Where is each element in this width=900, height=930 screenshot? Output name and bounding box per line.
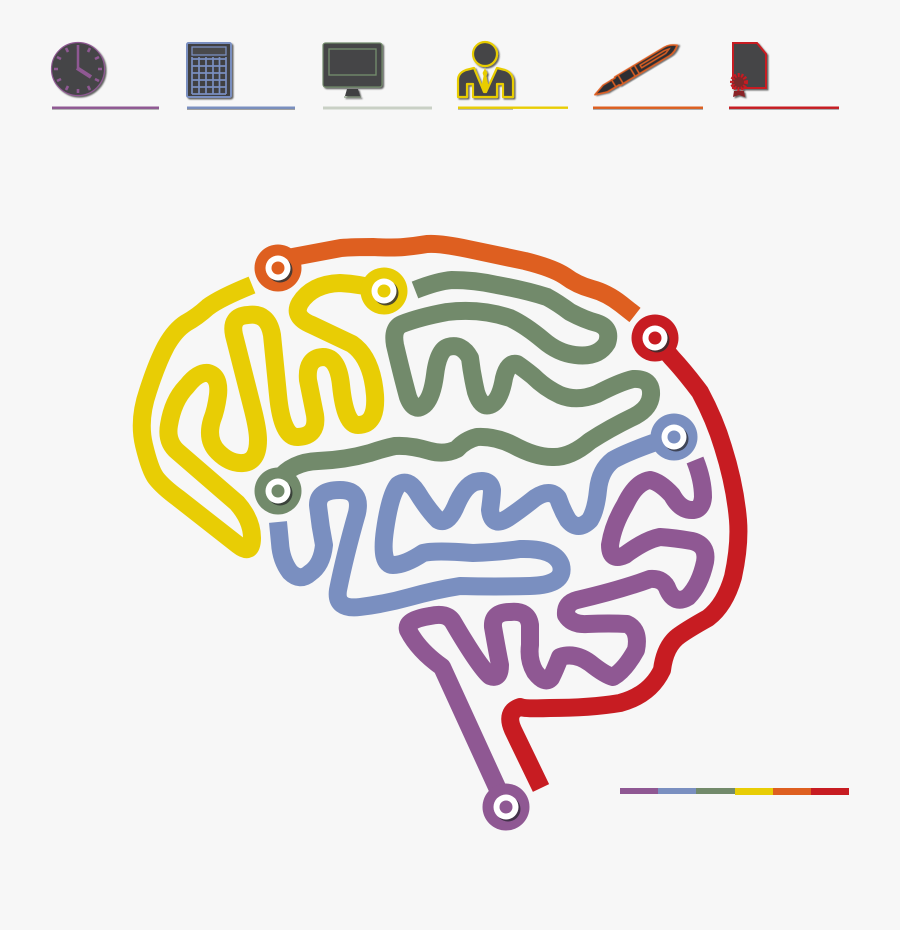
icon row xyxy=(52,41,839,110)
node: purple xyxy=(482,784,530,830)
icon: businessperson xyxy=(458,42,513,97)
node: blue xyxy=(650,414,698,460)
icon underlines xyxy=(52,106,839,110)
path: purple xyxy=(408,460,705,807)
icon: fountain pen xyxy=(592,41,680,99)
path: red xyxy=(510,338,738,788)
icon: calculator xyxy=(187,43,231,97)
path: green xyxy=(278,280,651,491)
icon: clock xyxy=(52,42,104,96)
path: blue xyxy=(278,437,674,607)
icon: monitor xyxy=(323,43,382,97)
brain diagram xyxy=(142,244,738,830)
icon: certificate xyxy=(732,43,766,97)
path: orange xyxy=(278,244,635,315)
node: yellow xyxy=(360,268,408,314)
node: green xyxy=(254,468,302,514)
colour legend bar xyxy=(620,788,849,795)
node: red xyxy=(632,314,678,362)
node: orange xyxy=(254,244,302,292)
path: yellow xyxy=(142,283,384,549)
